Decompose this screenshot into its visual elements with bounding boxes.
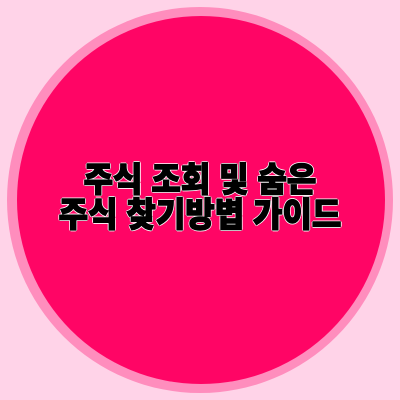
title [58,161,342,234]
title: 주식 찾기방볍 가이드 [59,195,341,234]
title: 주식 조회 및 숨은 [84,161,316,199]
